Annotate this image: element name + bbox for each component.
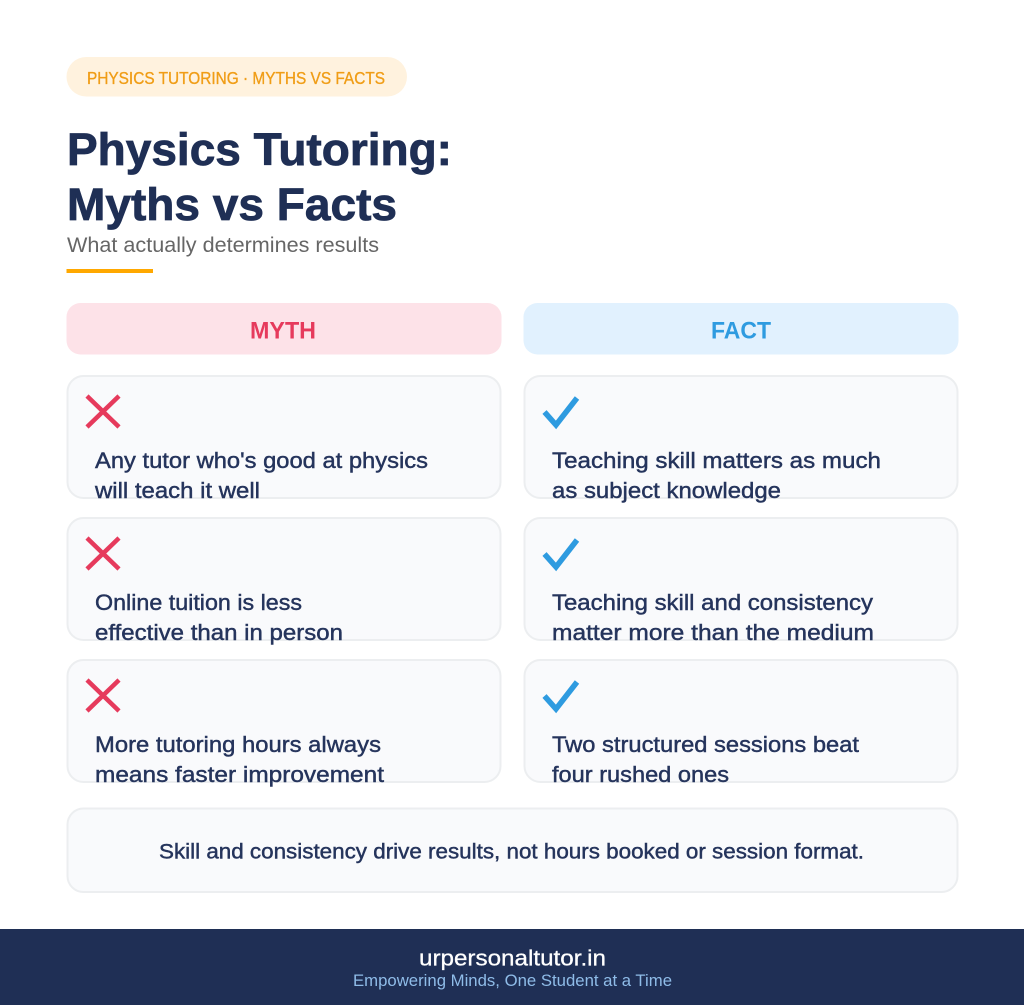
column header: myth: MYTH	[250, 318, 316, 344]
fact card 1: as subject knowledge	[552, 478, 781, 503]
myth card 3: means faster improvement	[95, 762, 385, 787]
column header: fact	[524, 303, 958, 354]
fact card 2	[524, 518, 958, 645]
column header: fact: FACT	[711, 318, 771, 344]
subtitle: What actually determines results	[67, 234, 379, 257]
myth card 3	[68, 660, 500, 787]
icon: red cross	[87, 680, 119, 711]
footer	[0, 929, 1024, 1005]
myth card 1	[68, 376, 500, 503]
fact card 1	[524, 376, 958, 503]
takeaway panel: Skill and consistency drive results, not hours booked or session format.	[159, 840, 864, 864]
fact card 1: Teaching skill matters as much	[552, 448, 881, 473]
tag pill	[66, 57, 407, 96]
icon: red cross	[87, 538, 119, 569]
footer: Empowering Minds, One Student at a Time	[353, 971, 672, 990]
icon: red cross	[87, 396, 119, 427]
title: Physics Tutoring:	[67, 124, 452, 175]
icon: blue check	[544, 398, 577, 425]
takeaway panel	[68, 808, 958, 892]
myth card 1: Any tutor who's good at physics	[95, 448, 428, 473]
fact card 3: Two structured sessions beat	[552, 732, 860, 757]
icon: blue check	[544, 682, 577, 709]
fact card 3: four rushed ones	[552, 762, 729, 787]
fact card 2: Teaching skill and consistency	[552, 590, 874, 615]
myth card 2: Online tuition is less	[95, 590, 302, 615]
fact card 2: matter more than the medium	[552, 620, 874, 645]
title	[67, 124, 452, 230]
footer: urpersonaltutor.in	[419, 946, 606, 970]
title: Myths vs Facts	[67, 179, 397, 230]
column header: myth	[66, 303, 502, 354]
accent underline	[66, 269, 153, 273]
icon: blue check	[544, 540, 577, 567]
myth card 2	[68, 518, 500, 645]
tag pill: PHYSICS TUTORING · MYTHS VS FACTS	[87, 68, 385, 88]
myth card 3: More tutoring hours always	[95, 732, 381, 757]
fact card 3	[524, 660, 958, 787]
myth card 2: effective than in person	[95, 620, 343, 645]
myth card 1: will teach it well	[94, 478, 260, 503]
